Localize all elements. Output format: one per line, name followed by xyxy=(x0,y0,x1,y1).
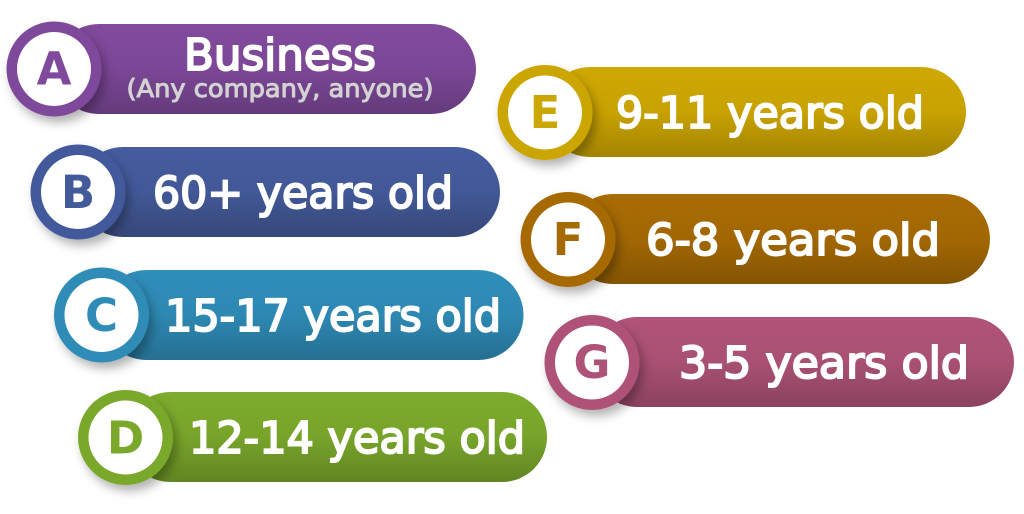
pill B: 60+ years old xyxy=(30,144,500,240)
badge B: B xyxy=(61,166,95,219)
badge A: A xyxy=(37,42,72,96)
pill G bar xyxy=(592,317,1014,407)
label: 3-5 years old: 3-5 years old xyxy=(679,338,969,389)
label: 12-14 years old: 12-14 years old xyxy=(189,413,525,464)
pill D: 12-14 years old xyxy=(78,390,547,485)
badge E xyxy=(498,65,592,160)
badge G xyxy=(544,315,640,410)
label: 60+ years old: 60+ years old xyxy=(153,168,453,219)
badge F: F xyxy=(553,213,583,266)
pill E: 9-11 years old xyxy=(498,65,966,160)
pill A bar xyxy=(54,24,476,114)
pill C bar xyxy=(102,270,524,360)
label: 9-11 years old: 9-11 years old xyxy=(616,88,924,139)
pill B bar xyxy=(78,147,500,237)
pill F: 6-8 years old xyxy=(520,192,990,287)
heading: Business: Business xyxy=(184,30,376,81)
pill G: 3-5 years old xyxy=(544,315,1014,410)
badge E: E xyxy=(530,86,560,139)
badge D xyxy=(78,390,173,485)
label: 15-17 years old: 15-17 years old xyxy=(165,291,501,342)
label: 6-8 years old: 6-8 years old xyxy=(646,215,940,266)
badge G: G xyxy=(574,336,610,389)
badge D: D xyxy=(107,412,144,464)
badge C: C xyxy=(85,289,118,342)
pill D bar xyxy=(126,392,547,482)
pill F bar xyxy=(568,194,990,284)
pill E bar xyxy=(545,67,966,157)
badge C xyxy=(54,268,149,362)
badge B xyxy=(30,144,126,240)
pill A: Business xyxy=(6,22,476,116)
subheading: any company: (Any company, anyone) xyxy=(126,74,434,103)
badge F xyxy=(520,192,616,287)
badge A xyxy=(6,22,102,116)
pill C: 15-17 years old xyxy=(54,268,524,362)
